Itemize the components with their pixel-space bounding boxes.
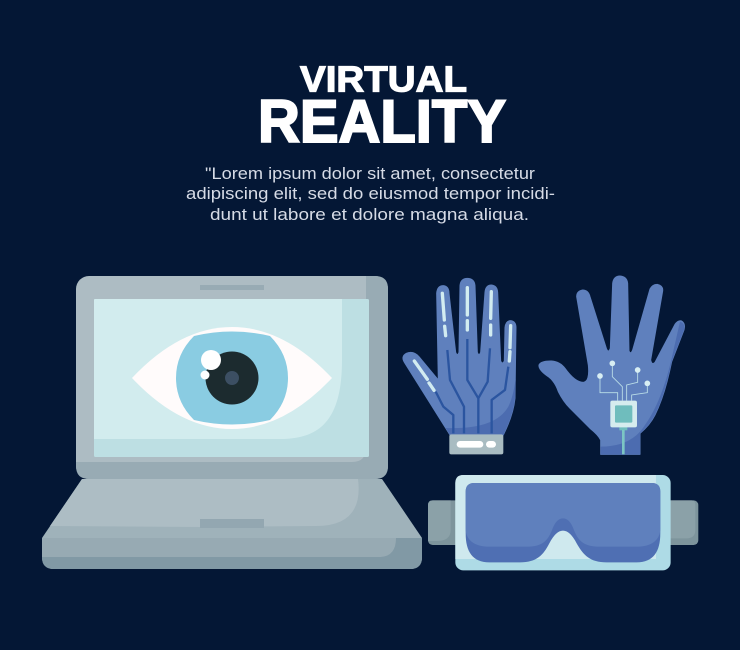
circuit traces (600, 363, 647, 401)
chip (610, 401, 637, 454)
goggle frame (455, 475, 671, 570)
laptop (42, 276, 422, 569)
intro text block (186, 164, 555, 224)
hand shape (539, 276, 684, 454)
hand shading (601, 322, 684, 454)
glove hand (403, 278, 516, 435)
circuit nodes (597, 360, 650, 386)
right strap (665, 500, 698, 545)
intro text block: dunt ut labore et dolore magna aliqua. (210, 205, 529, 224)
icon: eye (132, 327, 332, 429)
title (258, 58, 506, 155)
laptop screen (94, 299, 369, 457)
glove circuit lines (436, 339, 508, 433)
title: VIRTUAL (300, 58, 467, 99)
icon: circuit glove (403, 278, 516, 454)
left strap (428, 500, 461, 545)
laptop base (42, 479, 422, 569)
glove cuff (449, 434, 503, 454)
intro text block: adipiscing elit, sed do eiusmod tempor incidi- (186, 184, 555, 203)
title: REALITY (258, 88, 506, 155)
goggle lens (466, 483, 660, 562)
intro text block: "Lorem ipsum dolor sit amet, consectetur (205, 164, 535, 183)
icon: VR goggles (428, 475, 698, 570)
laptop lid (76, 276, 388, 479)
glove finger sensors (414, 288, 511, 390)
icon: chip hand (539, 276, 684, 454)
